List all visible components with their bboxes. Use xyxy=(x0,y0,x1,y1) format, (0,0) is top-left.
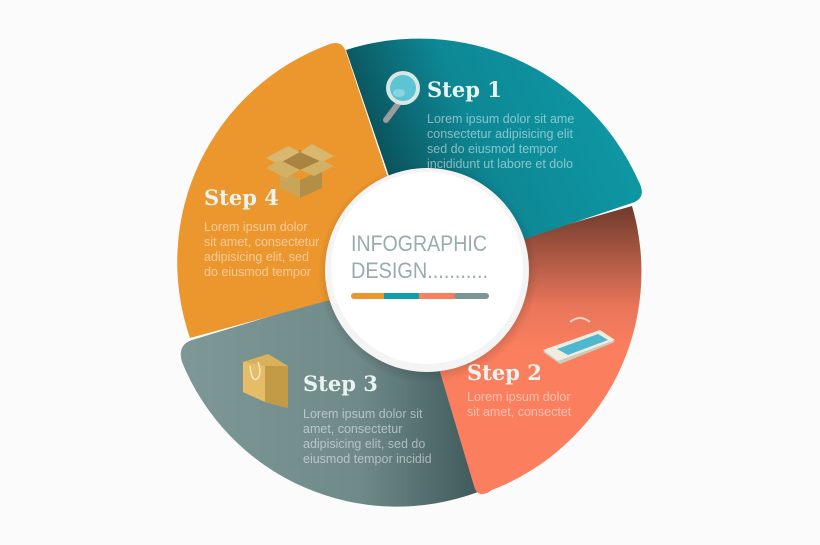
step 4 text xyxy=(204,185,319,279)
segment: step 4 orange xyxy=(177,43,392,338)
segment: step 1 teal xyxy=(346,39,642,240)
step 3 text xyxy=(303,371,432,466)
step 2 text: Lorem ipsum dolor xyxy=(467,390,571,404)
step 1 text: sed do eiusmod tempor xyxy=(427,142,558,156)
step 3 text: adipisicing elit, sed do xyxy=(303,437,425,451)
step 2 text xyxy=(467,360,572,419)
icon: phone xyxy=(543,318,615,364)
icon: magnifier xyxy=(386,71,420,120)
step 1 text xyxy=(427,77,574,171)
center title: DESIGN........... xyxy=(351,258,488,283)
step 4 text: adipisicing elit, sed xyxy=(204,250,309,264)
step 3 text: amet, consectetur xyxy=(303,422,402,436)
step 4 text: Step 4 xyxy=(204,185,279,210)
icon: box xyxy=(266,144,334,198)
step 2 text: Step 2 xyxy=(467,360,542,385)
step 1 text: Lorem ipsum dolor sit ame xyxy=(427,112,574,126)
step 4 text: do eiusmod tempor xyxy=(204,265,311,279)
icon: shopping bag xyxy=(243,354,288,408)
progress bar xyxy=(351,293,489,299)
segment: step 2 coral xyxy=(440,206,641,494)
step 1 text: consectetur adipisicing elit xyxy=(427,127,573,141)
step 1 text: incididunt ut labore et dolo xyxy=(427,157,573,171)
center title xyxy=(351,231,488,283)
step 4 text: Lorem ipsum dolor xyxy=(204,220,308,234)
step 3 text: Lorem ipsum dolor sit xyxy=(303,407,423,421)
center title: INFOGRAPHIC xyxy=(351,231,487,256)
segment: step 3 gray xyxy=(181,298,478,507)
center circle xyxy=(318,163,538,383)
step 2 text: sit amet, consectet xyxy=(467,405,572,419)
step 4 text: sit amet, consectetur xyxy=(204,235,319,249)
step 3 text: eiusmod tempor incidid xyxy=(303,452,432,466)
step 1 text: Step 1 xyxy=(427,77,502,102)
step 3 text: Step 3 xyxy=(303,371,378,396)
